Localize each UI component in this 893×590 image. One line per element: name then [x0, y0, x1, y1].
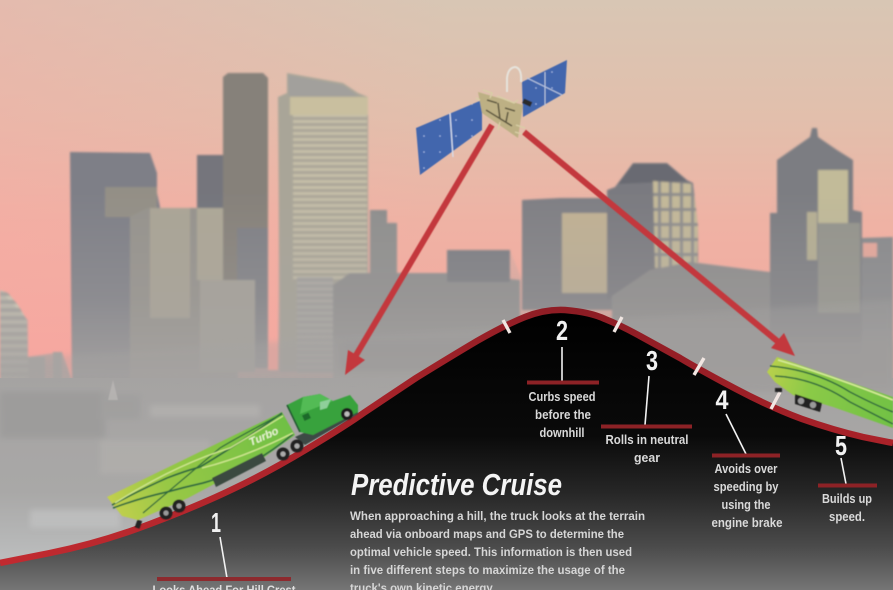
- building: glass tower gold band: [290, 97, 368, 115]
- trailer graphics two: [770, 366, 893, 424]
- building: tan windows: [562, 213, 610, 293]
- building: tall tower dark lower: [237, 228, 268, 368]
- building: small behind: [370, 210, 397, 273]
- description text: When approaching a hill, the truck looks at the terrain: [350, 509, 645, 523]
- step 3: [601, 345, 692, 465]
- step 5 label: Builds up: [822, 492, 872, 506]
- step 5 number: 5: [835, 430, 847, 461]
- step 2 label: before the: [535, 408, 591, 422]
- building: dark blocky tower: [70, 152, 160, 380]
- building: glass tower facade: [293, 115, 367, 280]
- step 2: [527, 315, 599, 440]
- building: right mid: [522, 198, 612, 310]
- step 1: [152, 507, 296, 590]
- step 2 label: Curbs speed: [528, 390, 596, 404]
- trailer wheels: [160, 506, 172, 520]
- building: far left stepped tower: [0, 290, 28, 382]
- arrow: satellite to truck one: [345, 125, 492, 375]
- description text: [350, 509, 645, 590]
- step 4: [712, 385, 783, 530]
- building: glass tower roof: [288, 75, 358, 96]
- road line: [0, 310, 893, 563]
- building: far right upper windows: [818, 170, 848, 223]
- building: tan inset: [105, 187, 157, 217]
- ground spire: [108, 380, 118, 400]
- satellite dish: [507, 67, 521, 92]
- step 5 label: speed.: [829, 510, 865, 524]
- step 2 number: 2: [556, 315, 568, 346]
- section tick marks: [503, 317, 780, 409]
- building: low left block: [28, 352, 62, 382]
- satellite body: [478, 92, 523, 138]
- hill fill: [0, 310, 893, 590]
- trailer graphics: [112, 413, 293, 508]
- step 4 label: [712, 462, 783, 530]
- truck one on the climb: [107, 394, 358, 529]
- building: tan face right: [197, 208, 235, 280]
- description text: ahead via onboard maps and GPS to determine the: [350, 527, 624, 541]
- step 4 label: using the: [722, 498, 771, 512]
- step 2 label: [528, 390, 596, 440]
- atmospheric haze on buildings: [0, 73, 893, 400]
- ground haze: [0, 378, 893, 575]
- building: low right band: [612, 262, 770, 380]
- city skyline: [0, 73, 893, 400]
- building: glass lower: [297, 277, 333, 373]
- trailer wheels two: [795, 394, 822, 412]
- tractor wheels: [276, 448, 290, 460]
- truck two on the descent: [767, 357, 893, 428]
- step 5: [818, 430, 877, 524]
- trailer landing gear: [135, 520, 142, 529]
- building: far right lower face: [818, 223, 860, 313]
- step 4 label: Avoids over: [714, 462, 778, 476]
- building: glass tower: [278, 73, 368, 372]
- building: central dark: [447, 250, 510, 282]
- trailer body: [107, 412, 295, 520]
- trailer logo: Turbo: [247, 425, 281, 449]
- title: Predictive Cruise: [351, 467, 562, 502]
- waterfront foreground: [0, 300, 893, 575]
- buildings: central low block: [333, 273, 520, 380]
- step 4 number: 4: [716, 385, 728, 415]
- upper haze band: [0, 300, 893, 390]
- description text: in five different steps to maximize the usage of the: [350, 563, 625, 577]
- building: crown tower: [607, 163, 698, 300]
- arrow: satellite to truck two: [524, 132, 795, 356]
- step 5 label: [822, 492, 872, 524]
- icon: satellite: [416, 60, 567, 175]
- building: tall tower: [223, 73, 268, 367]
- trailer body two: [767, 357, 893, 428]
- building: far right tower: [770, 128, 862, 380]
- step 1 number: 1: [211, 507, 221, 538]
- building: far right side windows: [807, 212, 817, 260]
- building: crown windows: [653, 181, 698, 268]
- step 3 label: Rolls in neutral: [606, 433, 688, 447]
- tractor cab: [287, 394, 358, 435]
- building: tan lower face: [200, 280, 255, 372]
- hill with road: [0, 310, 893, 590]
- building: mid block: [130, 208, 238, 380]
- step 3 label: [606, 433, 688, 465]
- building: dark shaft: [197, 155, 235, 208]
- building: tan face left: [150, 208, 190, 318]
- description text: optimal vehicle speed. This information is then used: [350, 545, 632, 559]
- satellite right solar panel: [522, 60, 567, 117]
- landing gear two: [775, 388, 782, 392]
- satellite left solar panel: [416, 100, 482, 175]
- step 3 number: 3: [646, 345, 658, 376]
- ground texture: [0, 340, 893, 528]
- step 4 label: speeding by: [714, 480, 779, 494]
- building: crown roof: [618, 164, 687, 184]
- step 2 label: downhill: [540, 426, 584, 440]
- step 3 label: gear: [634, 451, 660, 465]
- step 4 label: engine brake: [712, 516, 783, 530]
- trailer underside: [212, 453, 266, 487]
- building: far right edge: [862, 237, 893, 400]
- tractor chassis: [295, 408, 358, 445]
